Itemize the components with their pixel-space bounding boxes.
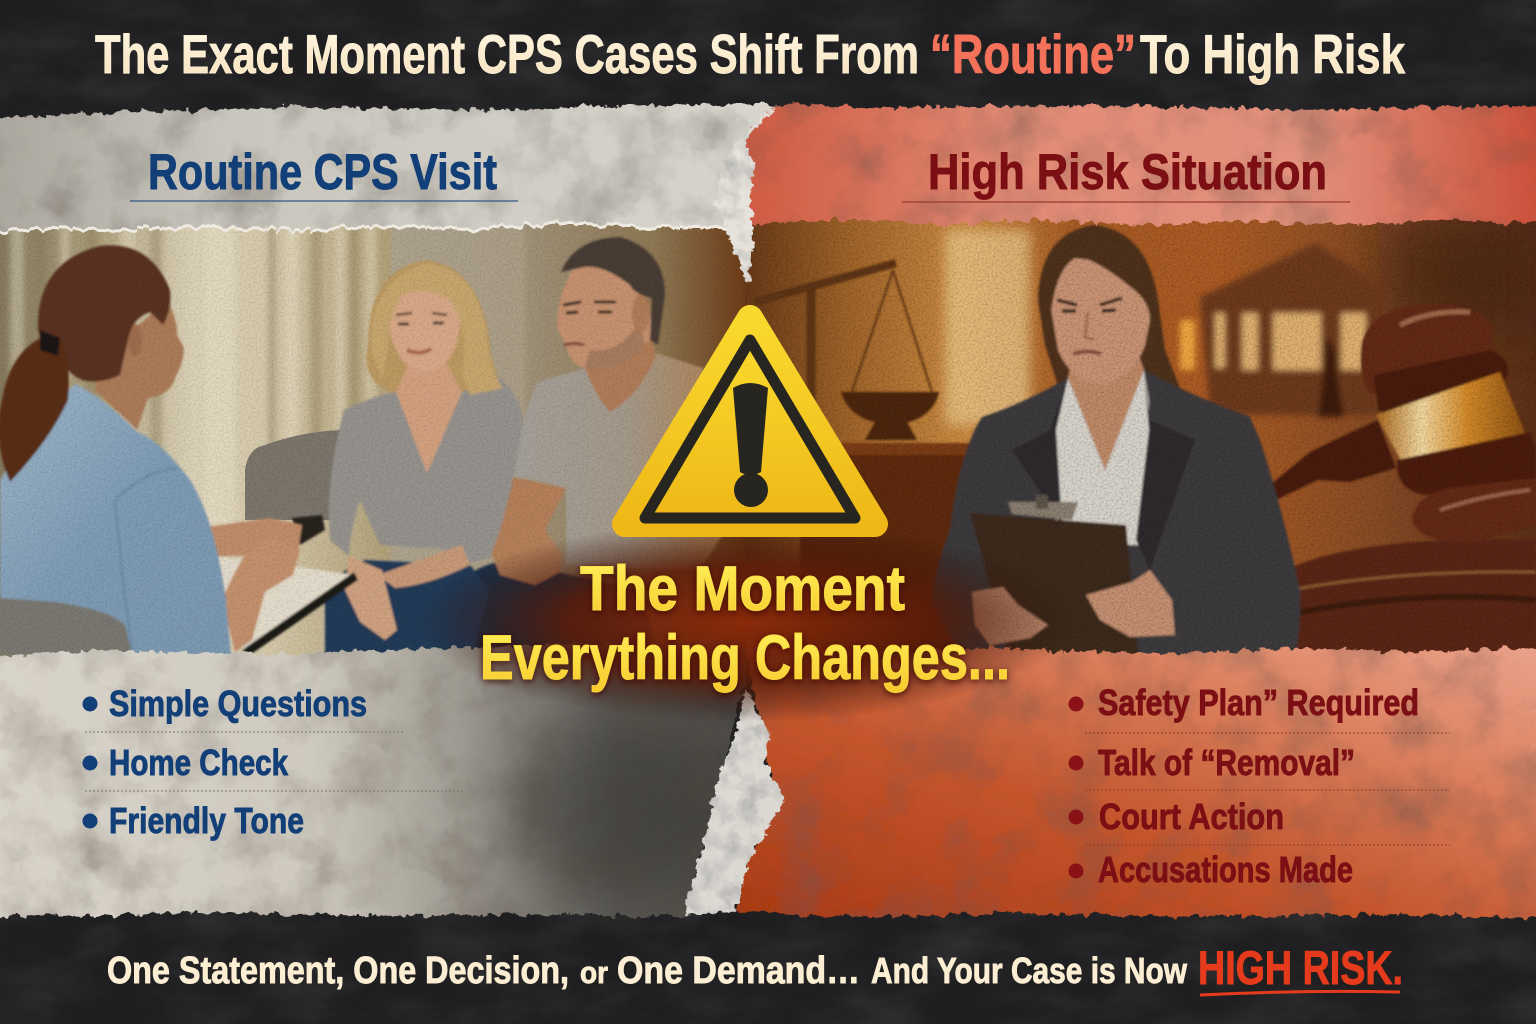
- man features: [563, 302, 616, 305]
- center text: Everything Changes...: [480, 623, 1010, 693]
- woman face: [388, 290, 461, 370]
- heading: High Risk Situation: [928, 144, 1327, 200]
- center text: [480, 554, 1010, 693]
- title: “Routine”: [930, 23, 1136, 85]
- worker shirt: [0, 384, 231, 655]
- woman hair back: [366, 260, 505, 400]
- bullet list: Court Action: [1099, 796, 1284, 837]
- center glow: [420, 522, 1070, 722]
- footer text: HIGH RISK.: [1198, 941, 1403, 994]
- footer text: or: [580, 955, 608, 990]
- worker ear: [128, 324, 142, 356]
- man hair: [561, 237, 665, 345]
- phone: [292, 515, 325, 545]
- woman hand: [345, 556, 397, 640]
- agent right hand: [1086, 570, 1175, 637]
- man arm: [490, 477, 566, 585]
- sofa: [245, 430, 340, 520]
- agent neck: [1068, 345, 1144, 470]
- bullet list: Safety Plan” Required: [1098, 682, 1419, 723]
- bullet list: [1068, 682, 1450, 890]
- worker far forearm: [200, 518, 302, 557]
- agent shirt: [1055, 370, 1150, 545]
- notebook: [218, 556, 351, 651]
- icon: warning triangle: [625, 318, 875, 524]
- curtains: [10, 225, 377, 525]
- gavel block: [1285, 539, 1536, 660]
- gavel handle: [1270, 420, 1396, 500]
- man ear: [632, 294, 650, 332]
- woman hair front: [371, 263, 503, 395]
- shirt seam: [115, 468, 178, 650]
- panel: routine photo: [0, 215, 750, 660]
- woman jeans: [325, 560, 490, 655]
- man jeans: [472, 562, 654, 650]
- window: [945, 230, 1030, 425]
- agent hair: [1038, 225, 1180, 392]
- title: The Exact Moment CPS Cases Shift From: [95, 23, 919, 85]
- gavel head: [1360, 304, 1493, 395]
- footer text: One Statement, One Decision,: [107, 950, 569, 992]
- woman forearm: [378, 545, 470, 588]
- man shirt: [514, 352, 722, 568]
- panel: high risk photo: [745, 215, 1536, 660]
- bullet list: Simple Questions: [109, 683, 367, 724]
- footer text: [107, 941, 1403, 995]
- courthouse: [1180, 243, 1391, 417]
- panel: high risk bullet paper: [735, 640, 1536, 918]
- panel: routine header paper: [0, 104, 780, 233]
- worker near arm: [224, 549, 300, 652]
- man face: [557, 262, 655, 369]
- worker hair: [38, 245, 170, 382]
- scales of justice: [755, 263, 932, 440]
- bullet list: [82, 683, 465, 841]
- bullet list: Talk of “Removal”: [1098, 742, 1355, 783]
- bullet list: Accusations Made: [1098, 849, 1353, 890]
- man neck: [585, 335, 656, 412]
- woman features: [396, 313, 447, 315]
- footer text: One Demand…: [617, 950, 860, 992]
- agent lapels: [1012, 378, 1068, 525]
- bullet list: Friendly Tone: [109, 800, 304, 841]
- title: To High Risk: [1140, 23, 1405, 85]
- center text: The Moment: [580, 554, 905, 624]
- worker face: [95, 295, 184, 430]
- panel: routine bullet paper: [0, 640, 750, 918]
- footer text: And Your Case is Now: [871, 950, 1188, 991]
- torn divider top: [716, 104, 778, 285]
- heading: Routine CPS Visit: [148, 144, 497, 200]
- woman sweater: [329, 378, 523, 565]
- desk: [800, 443, 968, 660]
- torn divider bottom: [684, 690, 785, 915]
- woman chest: [396, 360, 462, 473]
- agent features: [1057, 298, 1122, 305]
- chair: [0, 598, 132, 655]
- agent left hand: [972, 587, 1048, 645]
- panel: high risk header paper: [735, 104, 1536, 225]
- agent face: [1048, 256, 1150, 385]
- agent clipboard: [970, 513, 1139, 660]
- bullet list: Home Check: [109, 742, 289, 783]
- agent blazer: [932, 370, 1300, 660]
- ponytail: [0, 335, 69, 482]
